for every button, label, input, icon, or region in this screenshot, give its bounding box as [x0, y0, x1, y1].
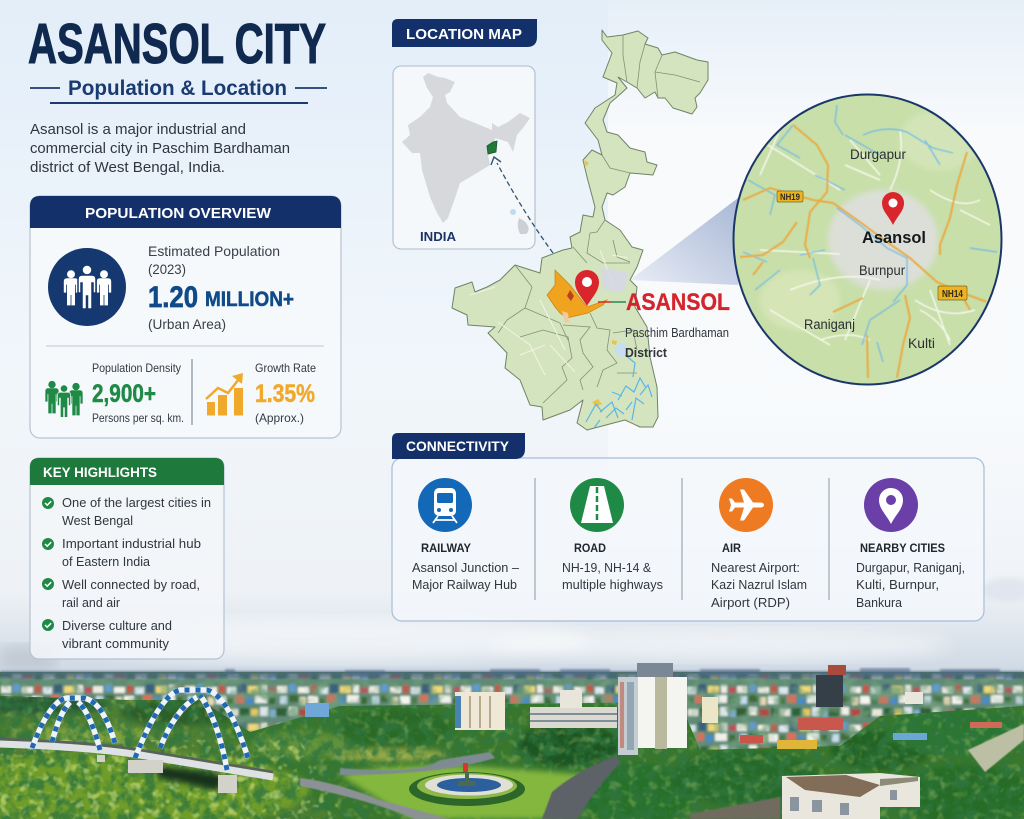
icon: location pin [864, 478, 918, 532]
column: road [562, 478, 663, 592]
estimated population stat: (2023) [148, 261, 186, 277]
intro description: commercial city in Paschim Bardhaman [30, 141, 290, 157]
population density stat: Persons per sq. km. [92, 411, 184, 425]
dashed arrow from state to India [491, 157, 553, 253]
highlights list: One of the largest cities in [62, 495, 211, 510]
growth rate stat: 1.35% [255, 380, 315, 408]
bridge with two arches [0, 690, 273, 793]
column: air: Airport (RDP) [711, 595, 790, 610]
estimated population stat: Estimated Population [148, 243, 280, 259]
growth rate stat: (Approx.) [255, 411, 304, 425]
column: road: ROAD [574, 541, 606, 555]
panel: India inset map [393, 66, 535, 249]
distant town band [0, 674, 1024, 754]
foreground trees [0, 690, 1024, 819]
intro description [30, 122, 290, 176]
panel heading [30, 196, 341, 228]
population density stat: 2,900+ [92, 380, 156, 408]
city labels: Durgapur [850, 147, 907, 162]
icon: green people [45, 381, 83, 417]
subtitle: Population & Location [68, 77, 287, 100]
connectivity heading [392, 433, 525, 459]
column: railway: RAILWAY [421, 541, 471, 555]
column: railway [412, 478, 520, 592]
callout line [598, 301, 612, 303]
NH19 badge: NH19 [780, 192, 800, 202]
highlights list: rail and air [62, 595, 121, 610]
estimated population stat: MILLION+ [205, 288, 294, 311]
wedge to zoom circle [630, 198, 738, 285]
highlights list [62, 495, 211, 651]
column: nearby cities: Kulti, Burnpur, [856, 577, 939, 592]
icon: city pin [882, 192, 904, 225]
column: nearby cities [856, 478, 965, 610]
India outline [402, 73, 530, 223]
column: nearby cities: Bankura [856, 595, 903, 610]
green lawn and roads [300, 724, 1024, 819]
highlights heading: KEY HIGHLIGHTS [43, 465, 157, 480]
highlights list: Diverse culture and [62, 618, 172, 633]
column: air: Nearest Airport: [711, 560, 800, 575]
icon: train [418, 478, 472, 532]
district boundaries [498, 35, 700, 403]
icon: population group [48, 248, 126, 326]
mid buildings [305, 665, 1002, 749]
highlights list: Well connected by road, [62, 577, 200, 592]
city labels: Kulti [908, 336, 935, 351]
highlights list: of Eastern India [62, 554, 151, 569]
column: air [711, 478, 807, 610]
shadow under bridge [150, 765, 225, 790]
city labels [804, 147, 935, 351]
fountain roundabout [409, 763, 525, 806]
icon: road [570, 478, 624, 532]
panel: connectivity [392, 433, 984, 621]
estimated population stat [148, 243, 294, 332]
column: road: multiple highways [562, 577, 663, 592]
panel: key highlights [30, 458, 224, 659]
column: railway: Major Railway Hub [412, 577, 517, 592]
zoom circle map [734, 94, 1002, 384]
city skyline photo [0, 663, 1024, 819]
growth rate stat [255, 361, 316, 425]
Andaman and faint islands [518, 218, 529, 234]
icon: airplane [719, 478, 773, 532]
West Bengal map [452, 30, 708, 430]
intro description: Asansol is a major industrial and [30, 122, 246, 138]
column: nearby cities: NEARBY CITIES [860, 541, 945, 555]
location map heading: LOCATION MAP [406, 27, 522, 43]
estimated population stat: 1.20 [148, 281, 198, 314]
West Bengal highlight [487, 141, 497, 154]
city labels: Burnpur [859, 263, 905, 278]
panel: population overview [30, 196, 341, 438]
panel heading: POPULATION OVERVIEW [85, 205, 272, 222]
intro description: district of West Bengal, India. [30, 160, 225, 176]
growth rate stat: Growth Rate [255, 361, 316, 375]
column: road: NH-19, NH-14 & [562, 560, 651, 575]
NH14 badge: NH14 [942, 289, 963, 300]
column: air: Kazi Nazrul Islam [711, 577, 807, 592]
tower [618, 663, 687, 755]
column: nearby cities: Durgapur, Raniganj, [856, 560, 965, 575]
highlights list: Important industrial hub [62, 536, 201, 551]
bottom right building [782, 773, 920, 819]
location map heading [392, 19, 537, 47]
highlights list: vibrant community [62, 636, 170, 651]
check icons [42, 497, 54, 631]
highlights heading [30, 458, 224, 485]
Asansol label [625, 289, 730, 360]
title: ASANSOL CITY [28, 12, 326, 76]
population density stat [92, 361, 184, 425]
column: air: AIR [722, 541, 741, 555]
estimated population stat: (Urban Area) [148, 316, 226, 332]
icon: red map pin [575, 270, 599, 306]
population density stat: Population Density [92, 361, 181, 375]
column: railway: Asansol Junction – [412, 560, 520, 575]
Paschim Bardhaman district highlight [547, 270, 607, 318]
Asansol label: District [625, 345, 668, 360]
INDIA label: INDIA [420, 229, 457, 244]
NH14 badge [938, 286, 967, 300]
connectivity heading: CONNECTIVITY [406, 439, 509, 454]
Asansol label: ASANSOL [626, 289, 730, 316]
city labels: Raniganj [804, 317, 855, 332]
Asansol label: Paschim Bardhaman [625, 325, 729, 340]
small rivers and roads [470, 250, 628, 375]
icon: growth chart [206, 373, 243, 416]
delta waterways [586, 355, 652, 428]
city labels: Asansol [862, 229, 926, 247]
highlights list: West Bengal [62, 513, 133, 528]
